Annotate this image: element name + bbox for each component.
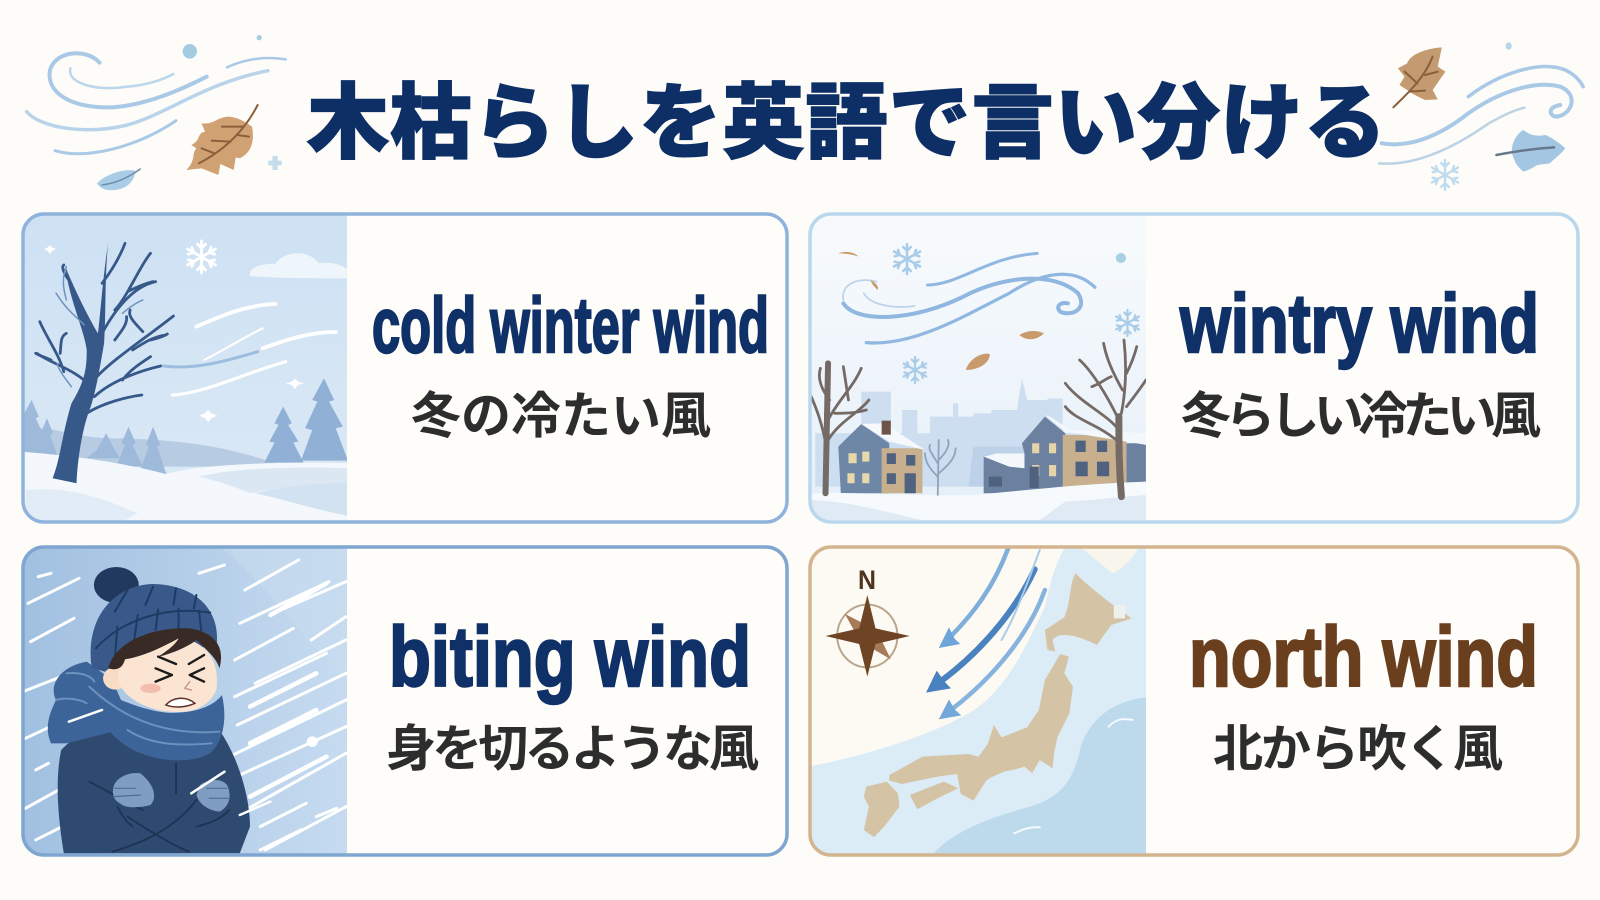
tree branches [36,243,173,413]
panel: cold winter wind [15,210,787,527]
background trees [20,400,166,474]
card frame [810,547,1578,855]
snow ground [810,482,1146,523]
wind swirls [843,253,1095,343]
gloves [113,773,230,812]
illustration: bare tree in snowy wind [15,210,352,527]
tree trunk [53,243,108,483]
shikoku [910,782,958,809]
wind swirls left [27,53,286,154]
falling leaves [838,252,1044,370]
japanese meaning: 冬らしい冷たい風 [1181,388,1541,444]
icon: blue leaf right [1496,130,1565,172]
decoration: right wind and leaves [1379,42,1583,172]
skyline [815,379,1085,486]
hokkaido [1045,573,1132,652]
honshu [889,654,1073,801]
coat [58,727,250,853]
decoration: left wind and leaves [27,35,286,190]
sea shallow [808,547,1147,857]
sparkles [44,245,304,422]
hair [108,628,221,669]
illustration: person shivering in wind [15,543,347,860]
snow ground [24,452,347,520]
card border [810,547,1578,855]
kyushu [864,782,899,837]
card frame [23,214,787,522]
icon: brown leaf [186,105,258,175]
illustration: map of Japan with north wind [805,543,1147,860]
water dot right [1506,42,1512,50]
english term: biting wind [389,610,751,704]
scarf front [87,683,224,760]
japanese meaning: 身を切るような風 [386,721,759,777]
wind streaks [172,304,336,395]
panel: biting wind [15,543,787,860]
cheek [140,684,161,693]
card border [23,214,787,522]
face [118,637,217,712]
icon: snowflake [188,241,215,273]
distant hills [40,428,274,467]
left bare tree [811,363,869,493]
icon: brown leaf right [1393,47,1445,107]
title: 木枯らしを英語で言い分ける [307,78,1386,169]
compass north label: N [858,565,876,595]
wind arrows [926,548,1045,719]
figure [48,567,250,853]
panel: north wind [805,543,1578,860]
left house [838,424,889,493]
japanese meaning: 冬の冷たい風 [411,388,711,444]
eyes and brows [156,655,204,682]
water dot [1116,253,1126,263]
japan [864,573,1132,837]
right bare tree [1065,340,1146,497]
scarf back [48,662,121,744]
cloud [250,253,347,278]
water dots left [183,35,262,59]
center bare tree [925,440,956,495]
sparkle [268,156,282,170]
ear [103,668,122,690]
northern land [1081,547,1139,573]
card border [810,214,1578,522]
icon: snowflake title [1432,160,1458,190]
icon: snowflakes [894,244,1139,383]
card frame [810,214,1578,522]
sea deep [933,697,1147,855]
wind swirls right [1379,67,1583,164]
hat pom [94,567,139,603]
compass [826,595,910,677]
english term: cold winter wind [372,281,769,369]
right house [984,417,1065,493]
nose [185,682,191,690]
hat [91,584,217,673]
card border [23,547,787,855]
japanese meaning: 北から吹く風 [1213,721,1503,777]
illustration: wind over snowy town [812,242,1146,520]
panel: wintry wind [805,210,1578,527]
card frame [23,547,787,855]
sea highlights [1014,719,1133,833]
snow streaks [23,560,346,850]
icon: small blue leaf [97,169,140,190]
mouth [166,698,195,707]
